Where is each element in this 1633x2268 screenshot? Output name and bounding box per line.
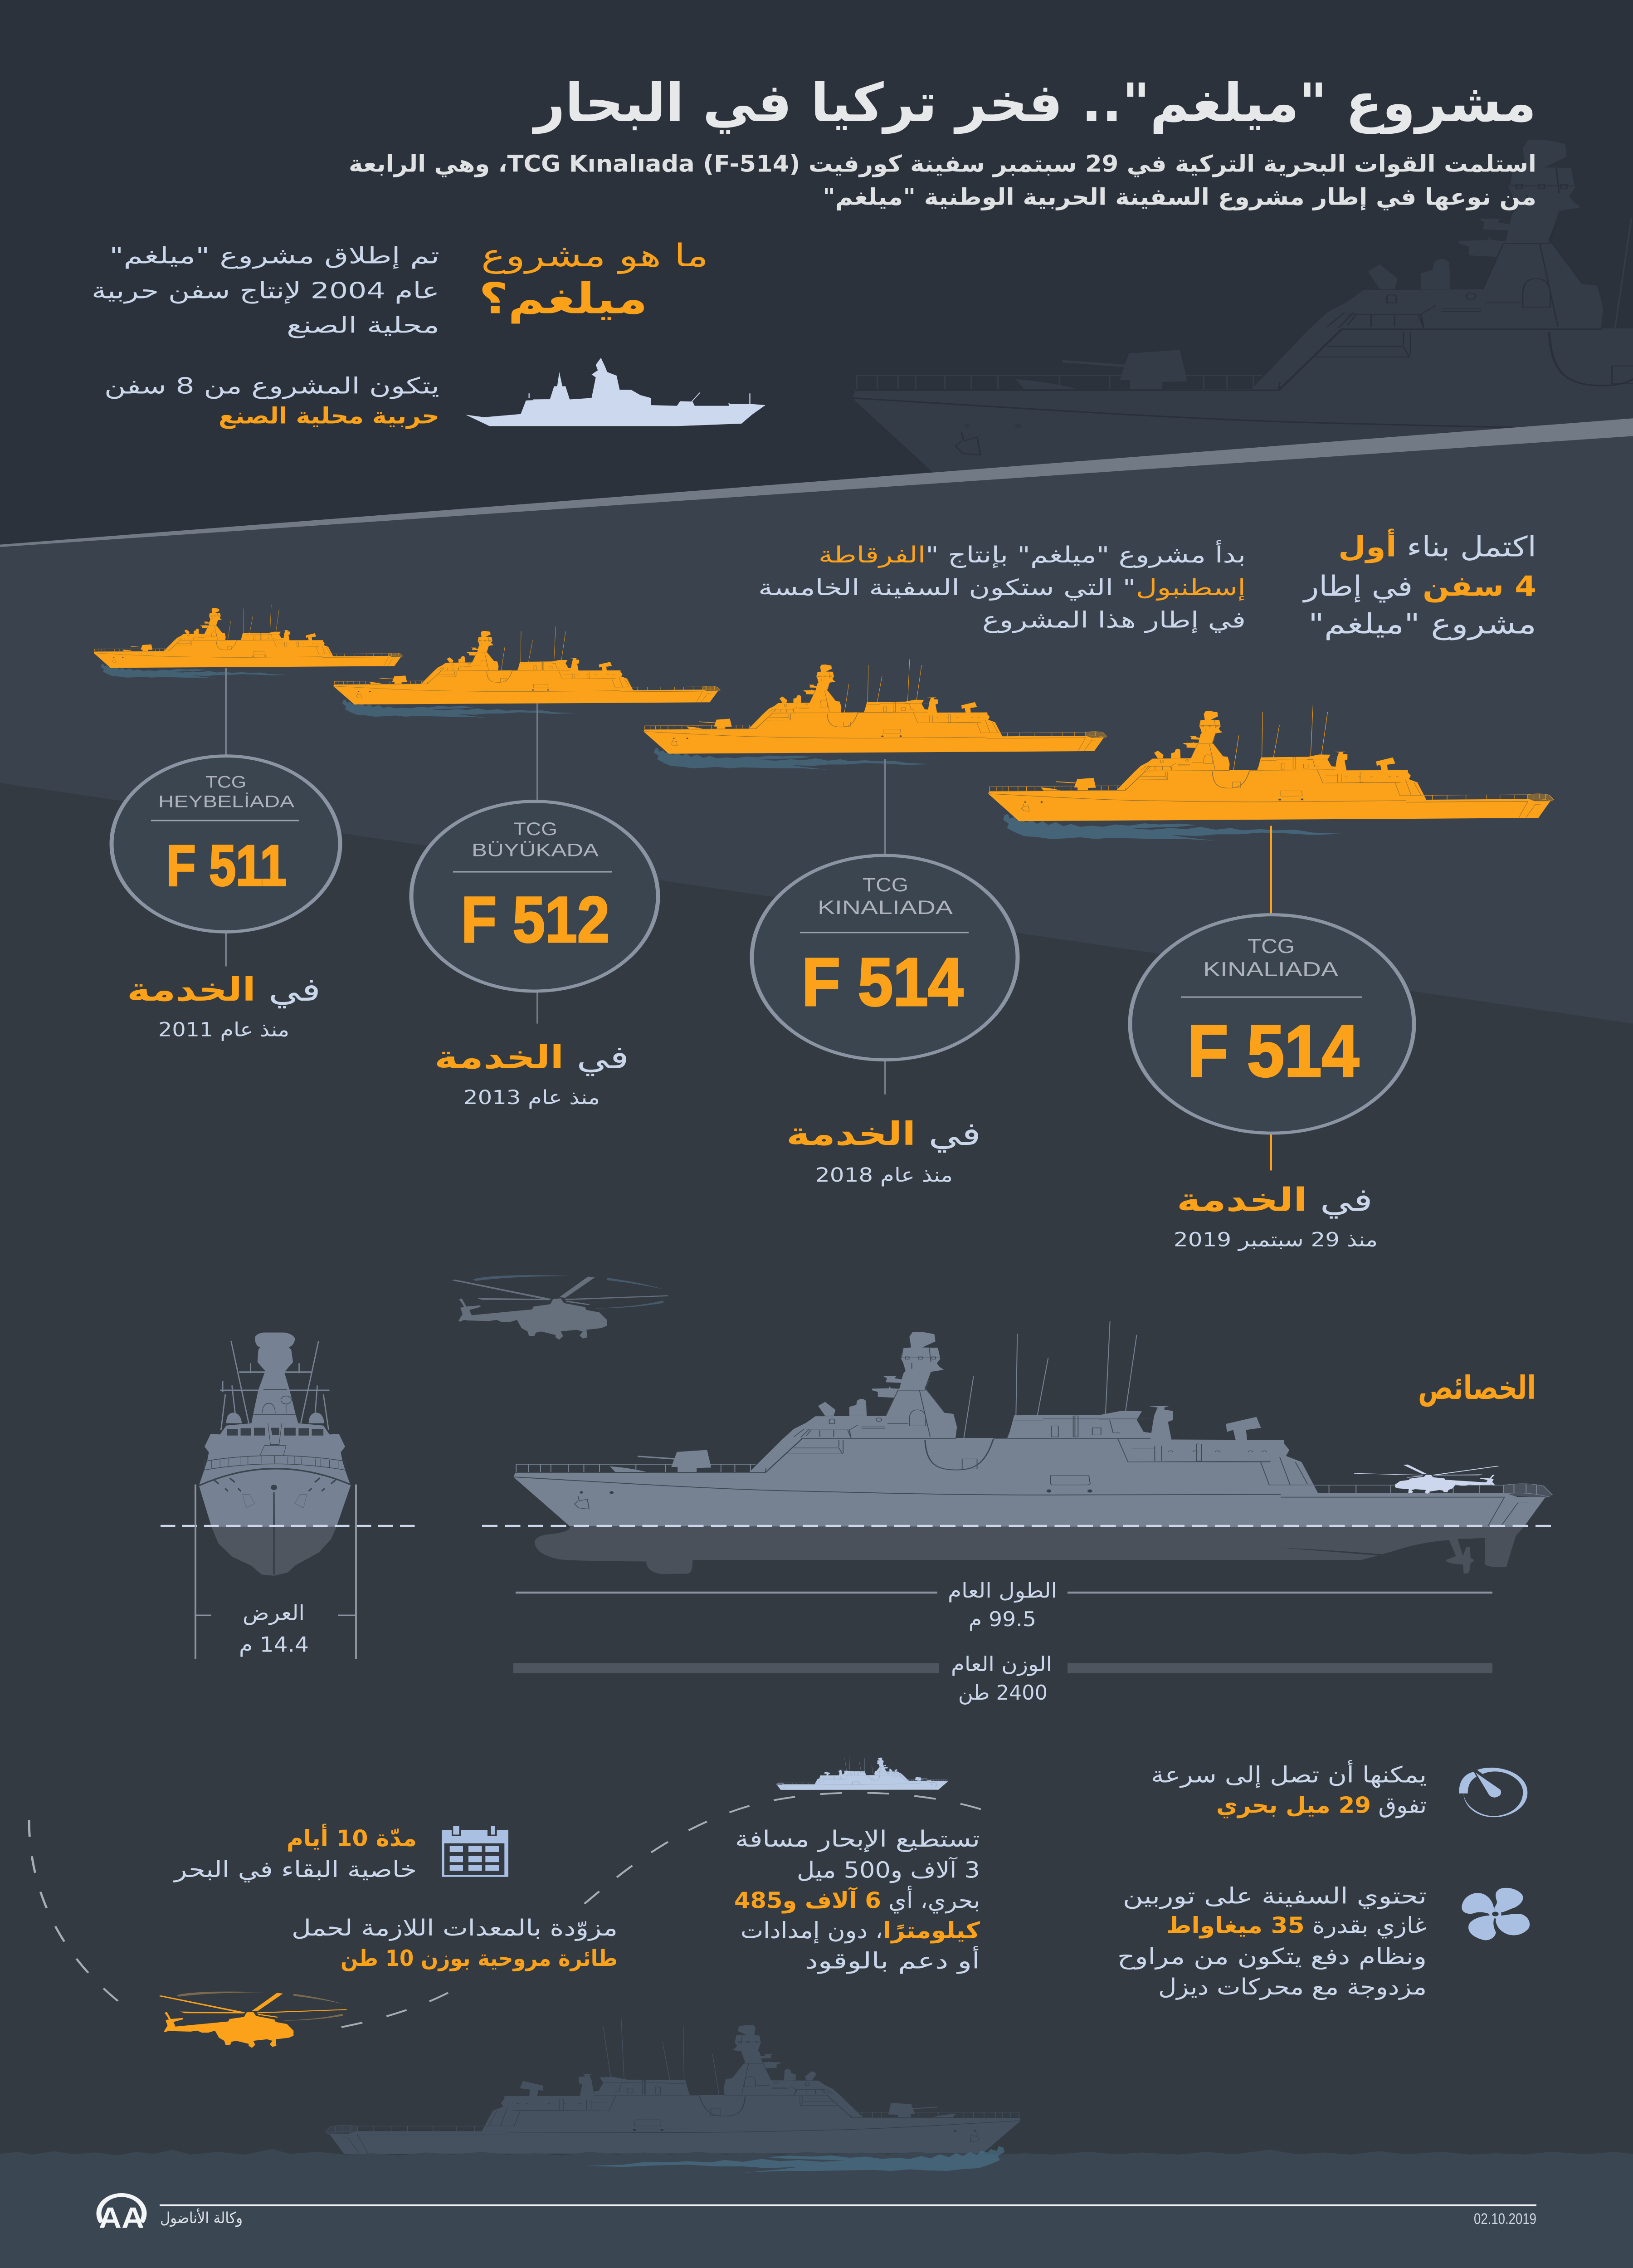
text block: range: [734, 1826, 980, 1974]
text block: Istanbul frigate: بدأ مشروع "ميلغم" بإنتاج "الفرقاطة: [819, 540, 1246, 568]
text block: first four ships: اكتمل بناء أول: [1338, 529, 1536, 563]
dimension: length: الطول العام: [948, 1579, 1057, 1603]
text block: range: 3 آلاف و500 ميل: [797, 1857, 980, 1883]
text block: project launch: عام 2004 لإنتاج سفن حربية: [92, 278, 439, 304]
helicopter, orange: [158, 1992, 347, 2048]
ship card: F 512: منذ عام 2013: [463, 1086, 600, 1109]
text block: first four ships: [1302, 529, 1536, 640]
text block: project launch: تم إطلاق مشروع "ميلغم": [109, 243, 439, 269]
text block: speed: يمكنها أن تصل إلى سرعة: [1151, 1760, 1427, 1788]
text block: range: كيلومترًا، دون إمدادات: [741, 1918, 980, 1944]
text block: speed: تفوق 29 ميل بحري: [1216, 1792, 1427, 1818]
ship card: F 512: F 512: [461, 884, 609, 956]
icon: calendar: [442, 1826, 508, 1877]
front view of the ship: [199, 1333, 351, 1576]
ship card: F 514 first: KINALIADA: [818, 896, 953, 919]
text block: range: بحري، أي 6 آلاف و485: [734, 1886, 980, 1914]
text block: ten days: [173, 1823, 417, 1882]
dimension: width: العرض: [243, 1601, 305, 1625]
small ship on range arc: [776, 1756, 948, 1790]
heading: what is the Milgem project: ميلغم؟: [479, 274, 648, 324]
icon: small white ship: [466, 358, 765, 426]
text block: eight ships: [104, 373, 439, 429]
dimension: weight: [513, 1653, 1492, 1705]
heading: what is the Milgem project: ما هو مشروع: [481, 237, 708, 274]
helicopter silhouette, grey: [452, 1275, 668, 1339]
ship card: F 512: TCG: [513, 819, 557, 839]
text block: propulsion: تحتوي السفينة على توربين: [1123, 1883, 1427, 1909]
text block: helicopter capacity: طائرة مروحية بوزن 10 طن: [341, 1945, 618, 1972]
dimension: length: [516, 1579, 1492, 1631]
dashed range arc: [29, 1793, 981, 2028]
main ship side profile: [513, 1321, 1552, 1574]
ship card: F 514 first: F 514: [802, 944, 963, 1020]
ship card: F 511: في الخدمة: [127, 971, 321, 1009]
text block: helicopter capacity: مزوّدة بالمعدات اللازمة لحمل: [292, 1915, 618, 1941]
text block: propulsion: [1117, 1883, 1427, 2000]
section heading: characteristics: الخصائص: [1418, 1369, 1536, 1407]
text block: propulsion: ونظام دفع يتكون من مراوح: [1117, 1944, 1427, 1970]
ship card: F 514 first: TCG: [863, 874, 908, 896]
text block: eight ships: حربية محلية الصنع: [219, 403, 439, 429]
ship card: F 511: TCG: [205, 773, 246, 792]
ship card: F 511: [94, 604, 403, 1041]
text block: range: أو دعم بالوقود: [805, 1946, 980, 1974]
dimension: weight: 2400 طن: [958, 1681, 1048, 1705]
ship card: F 511: F 511: [166, 834, 287, 898]
bottom ship wake: [586, 2146, 1004, 2173]
text block: range: تستطيع الإبحار مسافة: [735, 1826, 980, 1853]
dimension: width: [195, 1485, 356, 1659]
ship card: F 514 second, highlighted: [988, 703, 1554, 1251]
text block: first four ships: مشروع "ميلغم": [1308, 608, 1536, 640]
text block: ten days: خاصية البقاء في البحر: [173, 1857, 417, 1882]
text block: helicopter capacity: [292, 1915, 618, 1972]
dimension: weight: الوزن العام: [951, 1653, 1052, 1676]
background ship silhouette, top right: [852, 121, 1633, 487]
ship card: F 514 second, highlighted: TCG: [1248, 935, 1295, 958]
text block: eight ships: يتكون المشروع من 8 سفن: [104, 373, 439, 399]
intro text: استلمت القوات البحرية التركية في 29 سبتمبر سفينة كورفيت TCG Kınalıada (F-514)، وهي الرابعة: [349, 150, 1536, 177]
text block: propulsion: مزدوجة مع محركات ديزل: [1158, 1974, 1427, 2000]
dimension: length: 99.5 م: [969, 1608, 1036, 1631]
text block: Istanbul frigate: [758, 540, 1246, 634]
ship card: F 512: في الخدمة: [434, 1039, 629, 1076]
heading: what is the Milgem project: [479, 237, 708, 324]
text block: first four ships: 4 سفن في إطار: [1302, 570, 1536, 603]
ship card: F 512: BÜYÜKADA: [472, 840, 599, 860]
text block: project launch: محلية الصنع: [287, 313, 439, 338]
ship card: F 514 second, highlighted: F 514: [1187, 1010, 1359, 1092]
ship card: F 514 second, highlighted: منذ 29 سبتمبر 2019: [1174, 1228, 1378, 1251]
ship card: F 511: منذ عام 2011: [158, 1018, 289, 1041]
dimension: width: 14.4 م: [239, 1633, 309, 1657]
ship card: F 512: [333, 626, 721, 1109]
bottom ship silhouette: [325, 2018, 1021, 2154]
text block: project launch: [92, 243, 439, 338]
text block: Istanbul frigate: إسطنبول" التي ستكون السفينة الخامسة: [758, 575, 1246, 601]
intro text: [349, 150, 1536, 210]
ship card: F 514 first: منذ عام 2018: [815, 1163, 953, 1186]
icon: propeller: [1462, 1888, 1530, 1940]
waterline dashes: [161, 1525, 1557, 1527]
text block: propulsion: غازي بقدرة 35 ميغاواط: [1166, 1913, 1427, 1939]
ship card: F 514 first: [643, 658, 1107, 1186]
text block: speed: [1151, 1760, 1427, 1818]
footer: 02.10.2019: [1474, 2210, 1536, 2228]
footer: [99, 2195, 1536, 2234]
ship card: F 514 first: في الخدمة: [786, 1116, 981, 1153]
text block: Istanbul frigate: في إطار هذا المشروع: [982, 607, 1246, 634]
text block: ten days: مدّة 10 أيام: [287, 1823, 417, 1851]
ship card: F 514 second, highlighted: في الخدمة: [1177, 1182, 1373, 1219]
icon: speed gauge: [1459, 1768, 1527, 1817]
ship card: F 511: HEYBELİADA: [158, 792, 295, 811]
ship card: F 514 second, highlighted: KINALIADA: [1203, 958, 1339, 980]
sea band: [0, 2149, 1633, 2268]
footer: وكالة الأناضول: [160, 2208, 243, 2227]
footer: AA: [99, 2201, 144, 2234]
